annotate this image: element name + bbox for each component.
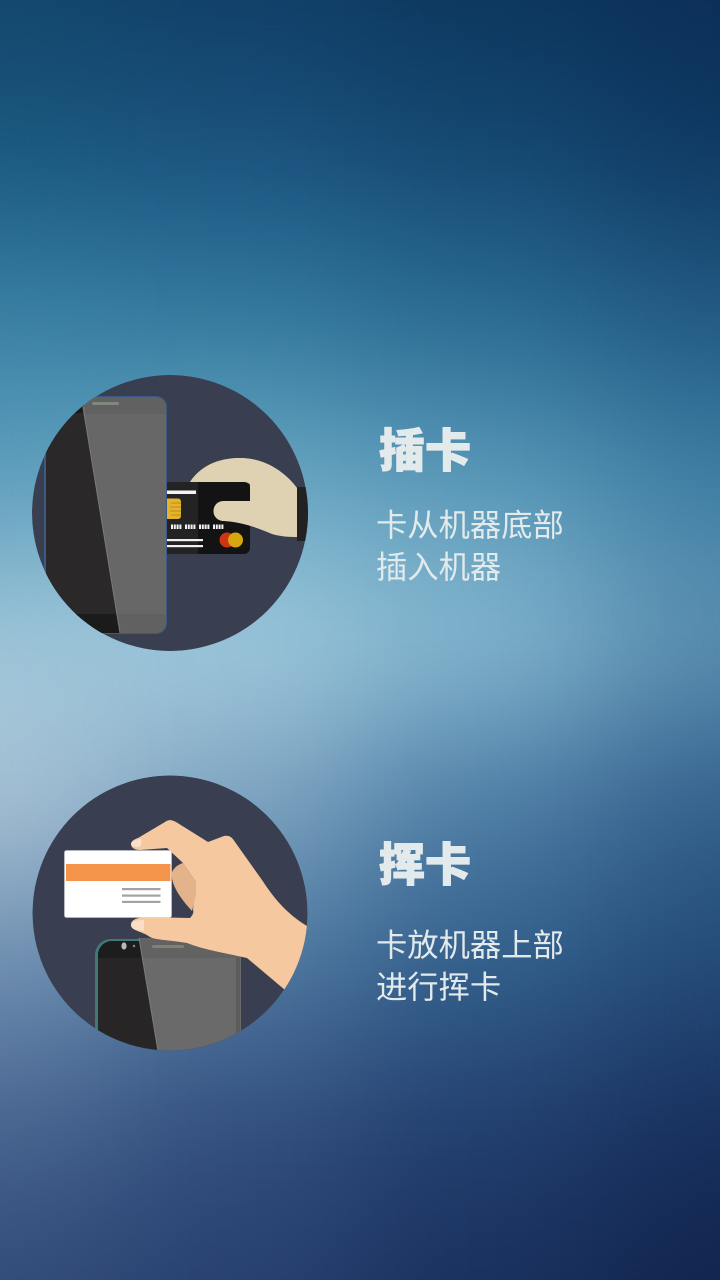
icon: hand top over card [190, 458, 297, 488]
text: tap card description: 卡放机器上部 [376, 928, 564, 963]
icon: phone [44, 396, 167, 634]
icon: phone [95, 938, 241, 1051]
heading: tap card: 挥卡 [379, 839, 471, 891]
text: tap card description: 进行挥卡 [376, 970, 501, 1005]
icon: hand behind card [190, 458, 297, 501]
illustration: insert card [32, 375, 308, 651]
text: insert card description [376, 508, 564, 585]
icon: cuff [297, 487, 308, 541]
icon: white card [64, 850, 172, 918]
text: insert card description: 插入机器 [376, 550, 501, 585]
text: insert card description: 卡从机器底部 [376, 508, 564, 543]
illustration: tap card [32, 776, 308, 1051]
icon: inner palm shadow [172, 863, 196, 911]
icon: thumb over card [214, 501, 297, 537]
icon: hand [131, 820, 307, 990]
text: tap card description [376, 928, 564, 1005]
heading: insert card: 插卡 [379, 425, 471, 477]
icon: black credit card [160, 482, 250, 554]
icon: fingernails [131, 839, 141, 847]
